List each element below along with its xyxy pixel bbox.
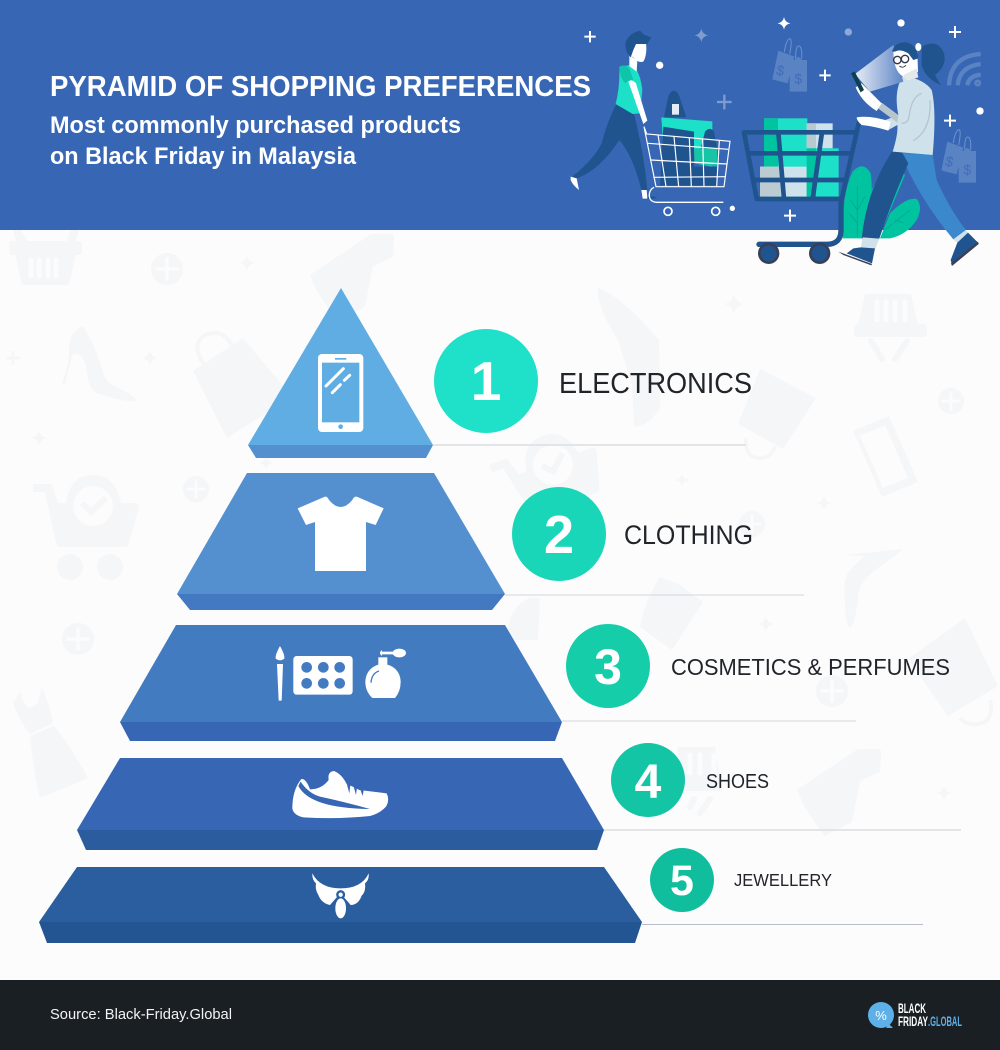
decorative sparkles and plus signs: [584, 17, 984, 222]
rank 5: jewellery: 5: [670, 857, 694, 905]
rank 2: clothing: [512, 487, 753, 581]
icon: necklace: [312, 873, 369, 918]
pyramid tier 1: electronics: [248, 288, 433, 458]
divider lines: [433, 445, 961, 924]
big shopping cart: [744, 122, 859, 263]
logo: Black Friday Global: FRIDAY: [898, 1013, 928, 1029]
rank 3: cosmetics and perfumes: [566, 624, 950, 708]
woman with phone: [838, 42, 979, 266]
logo: Black Friday Global: %: [875, 1008, 887, 1023]
goods in small cart: [660, 90, 717, 185]
rank 3: cosmetics and perfumes: COSMETICS & PERFUMES: [671, 654, 950, 680]
illustration: shoppers with carts: [571, 17, 984, 266]
rank 4: shoes: SHOES: [706, 771, 769, 793]
pyramid tier 4: shoes: [77, 758, 604, 850]
rank 1: electronics: [434, 329, 752, 433]
source text: Source: Black-Friday.Global: [50, 1007, 232, 1023]
logo: Black Friday Global: .GLOBAL: [928, 1013, 962, 1029]
subtitle: on Black Friday in Malaysia: [50, 143, 356, 170]
logo: Black Friday Global: BLACK: [898, 1000, 926, 1016]
icon: smartphone: [318, 354, 363, 432]
rank 4: shoes: [611, 743, 769, 817]
rank 5: jewellery: JEWELLERY: [734, 870, 832, 890]
footer bar: [0, 980, 1000, 1050]
title: PYRAMID OF SHOPPING PREFERENCES: [50, 71, 591, 103]
pyramid tier 5: jewellery: [39, 867, 642, 943]
man pushing cart: [571, 31, 657, 199]
icon: brush, palette and perfume: [276, 646, 406, 701]
pyramid tier 2: clothing: [177, 473, 505, 610]
icon: t-shirt: [298, 497, 384, 571]
background pattern of faded shopping icons: [6, 230, 998, 836]
price tags: [772, 39, 976, 183]
rank 2: clothing: CLOTHING: [624, 520, 753, 550]
rank 1: electronics: 1: [471, 350, 501, 412]
small wire shopping cart: [644, 127, 730, 215]
goods in big cart: [760, 118, 839, 198]
rank 2: clothing: 2: [544, 505, 574, 565]
wifi icon: [949, 54, 981, 85]
subtitle: Most commonly purchased products: [50, 112, 461, 139]
icon: running shoe: [292, 771, 388, 818]
rank 3: cosmetics and perfumes: 3: [594, 639, 622, 695]
rank 4: shoes: 4: [635, 756, 662, 809]
rank 1: electronics: ELECTRONICS: [559, 368, 752, 400]
pyramid tier 3: cosmetics and perfumes: [120, 625, 562, 741]
logo: Black Friday Global: [868, 1000, 962, 1029]
rank 5: jewellery: [650, 848, 832, 912]
plant: [843, 162, 920, 238]
header banner: [0, 0, 1000, 230]
subtitle: [50, 112, 461, 170]
